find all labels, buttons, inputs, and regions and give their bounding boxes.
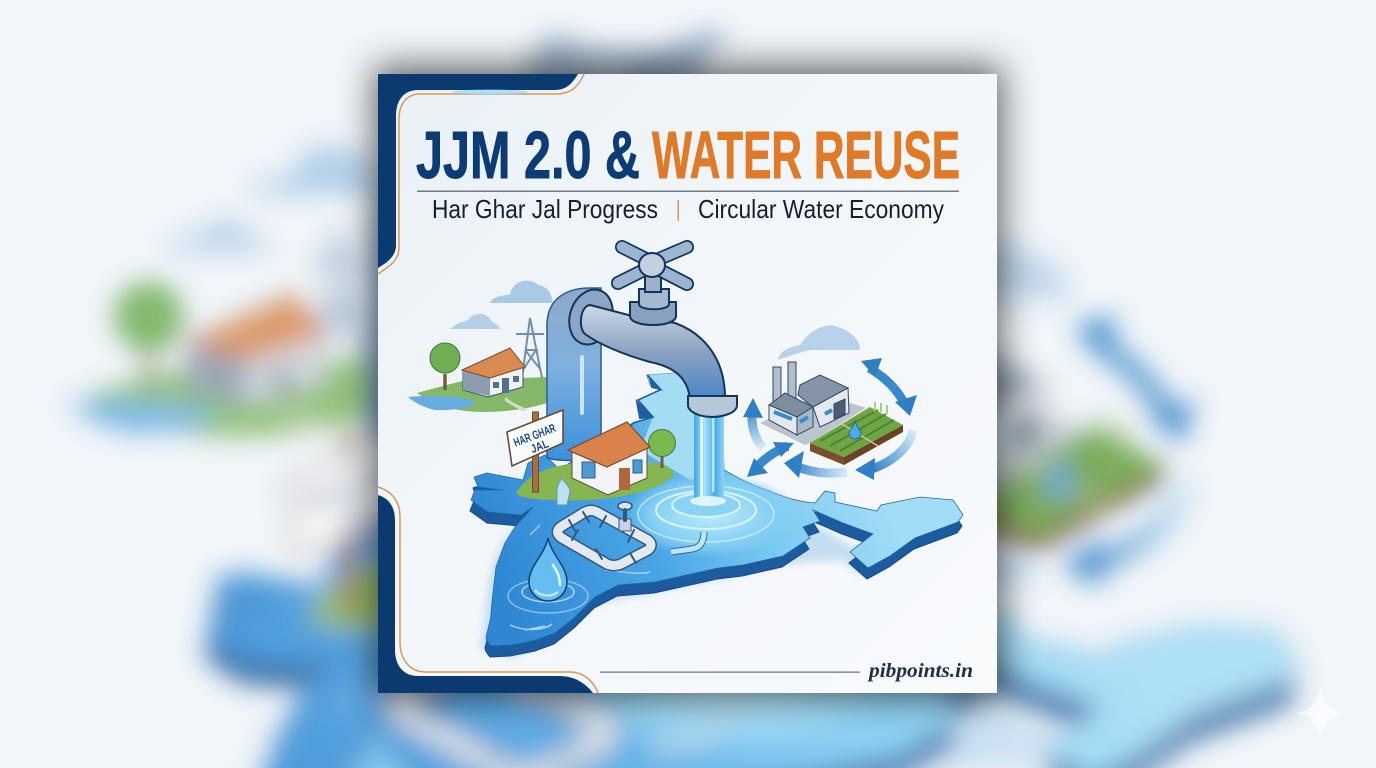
sign: Har Ghar Jal: HAR GHAR: [512, 421, 558, 450]
footer rule: [600, 672, 860, 673]
tall supply pipe: [547, 288, 601, 460]
village island with small house: [408, 318, 547, 412]
watermark sparkle: [1296, 688, 1344, 738]
water stream: [690, 408, 726, 506]
card panel: [378, 74, 997, 693]
faucet: [562, 247, 737, 417]
title: WATER REUSE: [652, 118, 960, 193]
pipe loop and valve: [558, 502, 651, 566]
hydrant: [557, 478, 570, 505]
factory cloud: [778, 325, 860, 360]
circular reuse arrows: [743, 358, 917, 480]
illustration: [408, 247, 963, 658]
tower: [516, 318, 544, 378]
subtitle: Circular Water Economy: [698, 194, 944, 224]
footer website: pibpoints.in: [867, 660, 973, 682]
bottom-left corner frame: [378, 487, 598, 693]
grass island with house: [516, 422, 676, 500]
title: JJM 2.0 &: [416, 118, 640, 193]
pipe highlight: [580, 355, 584, 415]
title: [416, 118, 960, 193]
factory and farm field: [760, 362, 903, 465]
faucet handle: [618, 247, 687, 284]
map soft shadow: [479, 488, 951, 658]
clouds upper left: [450, 281, 553, 329]
small elbow pipe: [671, 532, 704, 552]
water ripples: [508, 473, 800, 630]
card shadow: [374, 66, 1002, 698]
sign: Har Ghar Jal: [507, 410, 563, 492]
title rule: [417, 190, 959, 192]
subtitle: Har Ghar Jal Progress: [432, 194, 658, 224]
map of India: [470, 372, 963, 658]
subtitle: [432, 194, 944, 224]
sign: Har Ghar Jal: JAL: [529, 437, 550, 456]
water drop icon: [529, 538, 567, 601]
top-left corner frame: [378, 74, 584, 274]
